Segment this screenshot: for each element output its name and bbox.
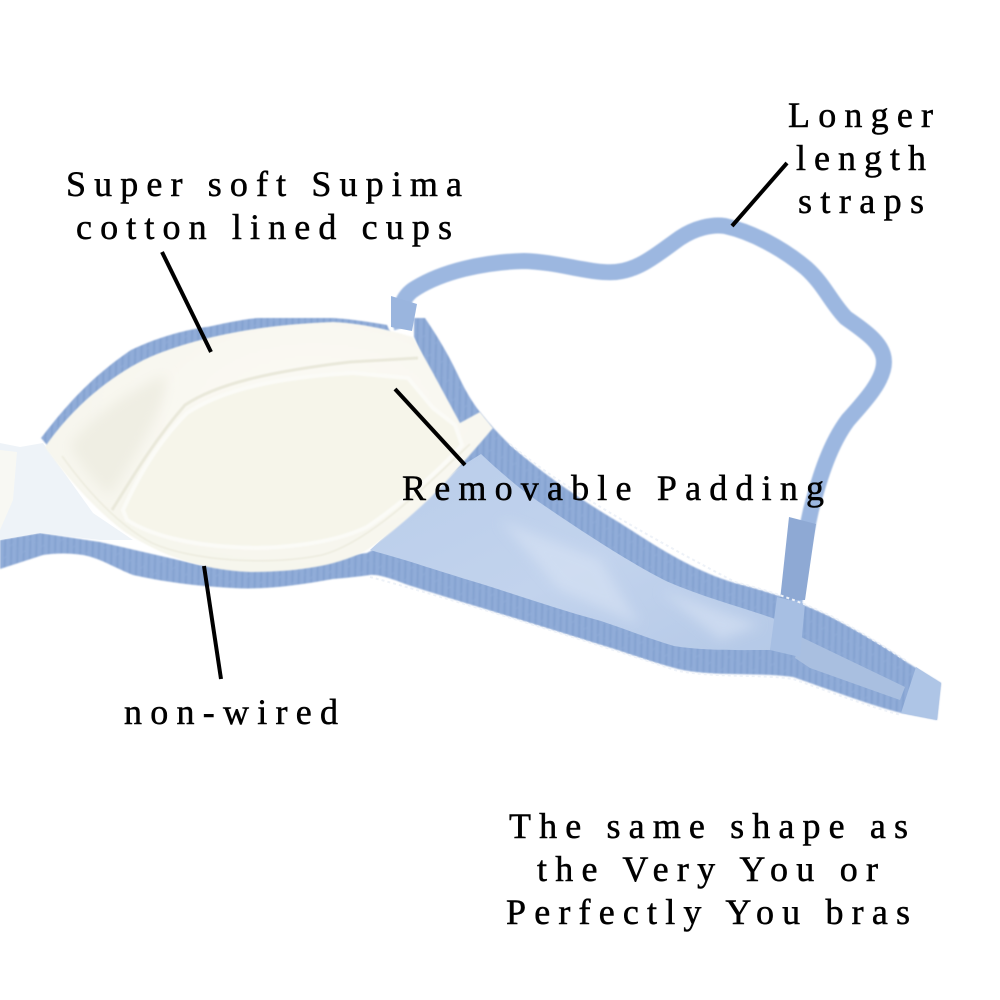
pointer: straps <box>732 163 787 226</box>
removable pad <box>123 373 462 548</box>
note: same shape: The same shape as <box>509 806 908 846</box>
centre gusset <box>0 443 133 540</box>
shoulder strap <box>400 226 884 605</box>
note: same shape <box>506 806 910 932</box>
product photo: bra <box>0 226 941 720</box>
strap adjuster <box>780 517 816 600</box>
hook tab <box>901 667 941 720</box>
cup upper lace edge <box>41 318 396 460</box>
lower scalloped lace edge <box>370 577 901 715</box>
label: longer length straps: length <box>796 138 926 178</box>
label: non-wired: non-wired <box>124 692 338 732</box>
label: super soft cotton cups: Super soft Supima <box>66 164 462 204</box>
cup lining <box>45 322 493 572</box>
note: same shape: Perfectly You bras <box>506 892 910 932</box>
wing fabric panel <box>370 454 778 650</box>
pointer: non-wired <box>204 566 221 679</box>
pointer: cotton lined cups <box>162 252 211 352</box>
gusset boning casing <box>0 450 17 530</box>
wing lace band <box>0 318 941 720</box>
underband rim seam <box>62 444 470 561</box>
upper strap loop <box>391 296 417 331</box>
label: longer length straps <box>788 95 933 221</box>
label: longer length straps: Longer <box>788 95 933 135</box>
label: super soft cotton cups: cotton lined cups <box>76 207 452 247</box>
wing fabric shading <box>500 520 760 640</box>
cup left shadow <box>70 375 166 495</box>
strap loop <box>770 597 805 657</box>
label: longer length straps: straps <box>798 181 924 221</box>
label: removable padding: Removable Padding <box>402 468 824 508</box>
label: super soft cotton cups <box>66 164 462 247</box>
wing fabric near hook <box>795 637 905 700</box>
pointer: removable padding <box>395 389 465 465</box>
pad pocket fold <box>112 358 418 510</box>
note: same shape: the Very You or <box>537 849 878 889</box>
upper scalloped lace edge <box>510 444 908 662</box>
